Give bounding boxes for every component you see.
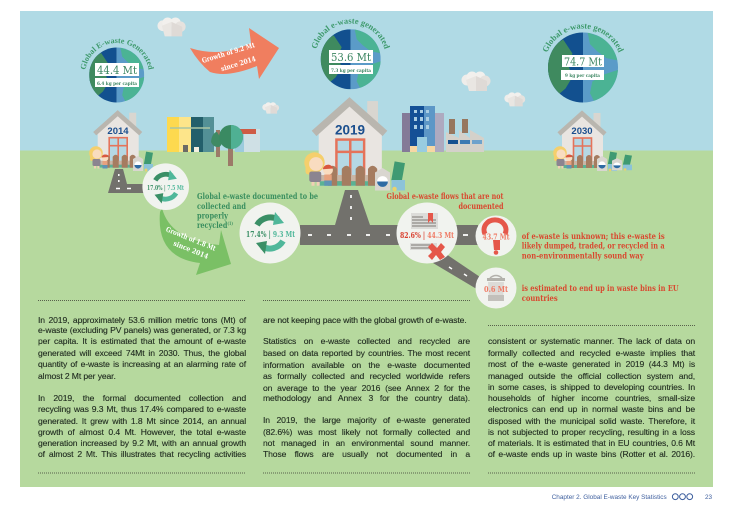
circle: 2014 recycled share: 17.0% | 7.5 Mt [147,184,184,192]
heading: documented e-waste: (1) [227,220,233,227]
text column 1: recycling was 9.3 Mt, thus 17.4% compared to e-waste [38,404,246,414]
heading: documented e-waste: recycled [197,221,237,231]
globe 2019: 53.6 Mt [331,50,371,64]
text: unknown e-waste: likely dumped, traded, or recycled in a [522,242,665,252]
footer [552,494,713,501]
house 2030: 2030 [571,126,593,137]
trees [211,125,243,166]
text column 2: as formally collected and recycled worldwide refers [263,370,470,380]
text column 1: In 2019, the formal documented collection and [38,393,246,403]
text column 1: generated. It grew with 1.8 Mt since 2014, an annual [38,416,246,426]
heading: documented e-waste: Global e-waste documented to be [197,192,318,202]
arrow: growth of 1.8 Mt: since 2014 [172,239,210,261]
arrow: growth of 9.2 Mt: since 2014 [220,54,257,73]
house 2014: 2014 [107,126,129,137]
circle: undocumented share: 82.6% | 44.3 Mt [400,231,454,241]
family 2030 [553,146,572,168]
text column 1: In 2019, approximately 53.6 million metric tons (Mt) of [38,314,246,324]
cloud right small [504,92,525,106]
text column 3: managed outside the official collection system and, [488,370,695,380]
cloud left [157,17,186,36]
text column 2: based on data reported by countries. The most recent [263,348,470,358]
blue office buildings [402,106,444,152]
text column 1: generated will exceed 74Mt in 2030. Thus, the global [38,348,246,358]
text column 2: are not keeping pace with the global growth of e-waste. [263,314,467,324]
text column 1: quantity of e-waste is increasing at an alarming rate of [38,359,246,369]
circle: 2014 recycled share [142,163,189,210]
circle: 2019 recycled share: 17.4% | 9.3 Mt [246,230,295,240]
arrow: growth of 1.8 Mt [160,208,231,275]
text column 1: per capita. It is estimated that the amount of e-waste [38,336,246,346]
text column 2: methodology and Annex 3 for the country data). [263,393,470,403]
footer: Chapter 2. Global E-waste Key Statistics [552,494,667,501]
footer: 23 [705,494,713,501]
text column 2: not managed in an environmental sound manner. [263,438,470,448]
pale building with red roof [235,129,260,152]
e-waste pile 2019 [375,161,405,191]
text column 3: consistent or systematic manner. The lack of data on [488,336,695,346]
house 2030 [559,113,605,168]
circle: 2019 recycled share [240,202,300,264]
globe 2030: 9 kg per capita [565,73,601,79]
house 2014 [95,113,141,168]
globe 2019: Global e-waste generated [312,18,390,50]
text: unknown e-waste [522,232,665,262]
text column 2: Statistics on e-waste collected and recycled are [263,336,470,346]
e-waste pile 2030 [597,152,632,172]
road 2019 [300,190,478,245]
green ground [20,150,713,487]
globe 2014: 44.4 Mt [97,63,137,77]
text: unknown e-waste: of e-waste is unknown; this e-waste is [522,232,665,242]
road to waste bin [433,254,486,291]
text column 3: households of higher income countries, small-size [488,393,695,403]
text: unknown e-waste: non-environmentally sound way [522,252,645,262]
text: waste bin: countries [522,294,558,304]
text column 3: electronics can end up in normal waste bins and be [488,404,695,414]
family 2014 [89,146,108,168]
text column 3: of e-waste ends up in waste bins (Rotter et al. 2016). [488,449,695,459]
text column 3 [488,336,696,459]
yellow and teal buildings [167,117,214,152]
text: waste bin: is estimated to end up in waste bins in EU [522,284,679,294]
text column 1: generation increased by 9.2 Mt, with an annual growth [38,438,246,448]
circle: unknown e-waste: 43.7 Mt [482,232,510,242]
circle: unknown e-waste [476,216,516,256]
globe 2030: Global e-waste generated [543,24,624,53]
heading: documented e-waste: properly [197,212,229,222]
e-waste pile 2014 [133,152,153,172]
arrow: growth of 9.2 Mt [190,28,279,79]
text column 2: In 2019, the large majority of e-waste generated [263,415,470,425]
heading: undocumented flows: Global e-waste flows that are not [386,192,504,202]
text column 3: of materials. It is estimated that in EU countries, 0.6 Mt [488,438,695,448]
heading: documented e-waste: collected and [197,202,246,212]
text column 3: formally collected and recycled e-waste implies that [488,348,695,358]
text: waste bin [522,284,679,304]
heading: undocumented flows [386,192,504,212]
text column 2 [263,314,470,459]
text column 1: of almost 2 Mt. This illustrates that recycling activities [38,449,246,459]
globe 2014: 6.4 kg per capita [97,81,138,87]
cloud right large [462,72,490,91]
text column 2: on average to the year 2016 (see Annex 2 for the [263,382,470,392]
sky background [20,11,713,151]
globe 2019: 7.3 kg per capita [331,68,372,74]
arrow: growth of 1.8 Mt: Growth of 1.8 Mt [165,225,218,253]
cloud center [262,102,279,114]
text column 3: in some cases, is shipped to developing countries. In [488,382,695,392]
text column 2: Those flows are usually not documented in a [263,449,470,459]
road 2014 [108,169,150,193]
family 2019 [304,152,333,186]
heading: undocumented flows: documented [458,202,504,212]
text column 1: growth of almost 0.4 Mt. However, the total e-waste [38,427,246,437]
text column 3: most of the e-waste generated in 2019 (44.3 Mt) is [488,359,695,369]
text column 1: almost 2 Mt per year. [38,370,116,380]
arrow: growth of 9.2 Mt: Growth of 9.2 Mt [201,40,256,65]
text column 3: is not subjected to proper recycling, resulting in a loss [488,427,695,437]
text column 1: e-waste (excluding PV panels) was generated, or 7.3 kg [38,325,246,335]
text column 1 [38,314,246,459]
circle: undocumented share [396,202,458,264]
globe 2030: 74.7 Mt [564,54,602,68]
globe 2014: Global E-waste Generated [80,38,154,70]
globe 2019 [312,18,390,90]
globe 2030 [543,24,624,102]
factory [446,119,484,152]
text column 2: information available on the e-waste documented [263,360,470,370]
house 2019 [314,101,385,186]
heading: documented e-waste [197,192,318,231]
text column 3: disposed with the municipal solid waste. Therefore, it [488,416,695,426]
circle: waste bin: 0.6 Mt [484,284,508,294]
house 2019: 2019 [335,122,365,138]
circle: waste bin [476,268,516,308]
text column 2: (82.6%) was most likely not formally collected and [263,427,470,437]
globe 2014 [80,38,154,102]
